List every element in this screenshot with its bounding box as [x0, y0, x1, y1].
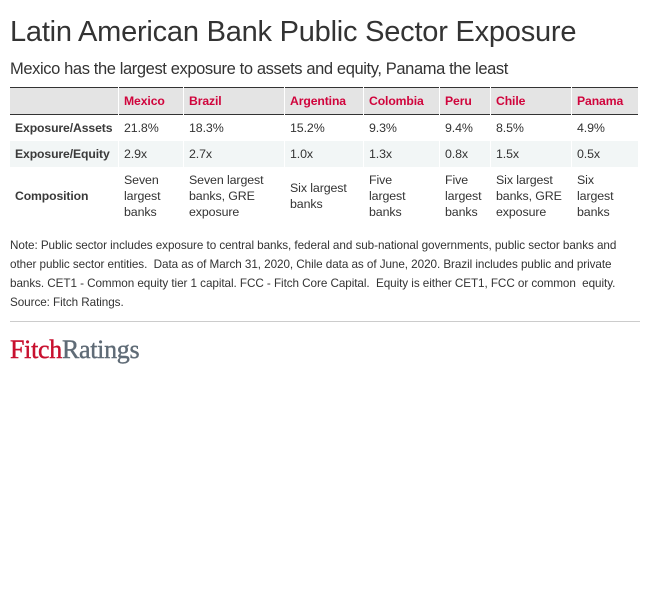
composition: Panama: banks	[577, 205, 610, 219]
value: 0.8x	[445, 147, 468, 161]
composition: Colombia: Five	[369, 173, 392, 187]
note: banks. CET1 - Common equity tier 1 capital. FCC - Fitch Core Capital. Equity is either CET1, FCC or common equity.	[10, 277, 615, 290]
note	[10, 239, 616, 309]
exposure/equity row background	[10, 141, 638, 167]
composition: Brazil: banks, GRE	[189, 189, 255, 203]
composition: Panama: Six	[577, 173, 594, 187]
value: 1.3x	[369, 147, 392, 161]
header: Peru: Peru	[445, 94, 472, 108]
composition: Mexico: Seven	[124, 173, 159, 187]
table header background	[10, 87, 638, 115]
composition: Colombia	[369, 173, 406, 219]
row label: Exposure/Assets: Exposure/Assets	[15, 121, 112, 135]
subtitle: Mexico has the largest exposure to assets and equity, Panama the least	[10, 60, 508, 78]
composition: Colombia: banks	[369, 205, 402, 219]
value: 18.3%	[189, 121, 224, 135]
composition: Mexico: largest	[124, 189, 160, 203]
composition: Peru: banks	[445, 205, 478, 219]
table	[10, 87, 638, 167]
note: Note: Public sector includes exposure to central banks, federal and sub-national governments, public sector banks and	[10, 239, 616, 252]
composition: Mexico	[124, 173, 160, 219]
note: Source: Fitch Ratings.	[10, 296, 124, 309]
row label: Composition: Composition	[15, 189, 88, 203]
composition: Chile: Six largest	[496, 173, 553, 187]
value: 4.9%	[577, 121, 605, 135]
value: 21.8%	[124, 121, 159, 135]
composition: Panama	[577, 173, 614, 219]
composition: Panama: largest	[577, 189, 614, 203]
header: Chile: Chile	[496, 94, 525, 108]
value: 2.9x	[124, 147, 147, 161]
header: Brazil: Brazil	[189, 94, 222, 108]
header: Mexico: Mexico	[124, 94, 165, 108]
composition: Colombia: largest	[369, 189, 406, 203]
note: other public sector entities. Data as of March 31, 2020, Chile data as of June, 2020. Brazil includes public and private	[10, 258, 612, 271]
composition: Brazil: Seven largest	[189, 173, 263, 187]
row label: Exposure/Equity: Exposure/Equity	[15, 147, 110, 161]
composition: Brazil	[189, 173, 264, 219]
value: 2.7x	[189, 147, 212, 161]
composition: Argentina	[290, 181, 347, 211]
divider	[10, 321, 640, 322]
value: 9.4%	[445, 121, 473, 135]
composition: Chile	[496, 173, 562, 219]
value: 1.0x	[290, 147, 313, 161]
logo: Fitch Ratings: FitchRatings	[10, 335, 139, 364]
header: Panama: Panama	[577, 94, 623, 108]
composition: Mexico: banks	[124, 205, 157, 219]
composition: Peru: largest	[445, 189, 482, 203]
header: Colombia: Colombia	[369, 94, 424, 108]
composition: Peru: Five	[445, 173, 468, 187]
value: 15.2%	[290, 121, 325, 135]
value: 0.5x	[577, 147, 600, 161]
composition: Chile: exposure	[496, 205, 546, 219]
composition: Argentina: Six largest	[290, 181, 347, 195]
composition: Peru	[445, 173, 482, 219]
composition: Chile: banks, GRE	[496, 189, 562, 203]
composition: Brazil: exposure	[189, 205, 239, 219]
title: Latin American Bank Public Sector Exposure	[10, 16, 576, 48]
composition: Argentina: banks	[290, 197, 323, 211]
value: 1.5x	[496, 147, 519, 161]
header: Argentina: Argentina	[290, 94, 346, 108]
value: 8.5%	[496, 121, 524, 135]
value: 9.3%	[369, 121, 397, 135]
